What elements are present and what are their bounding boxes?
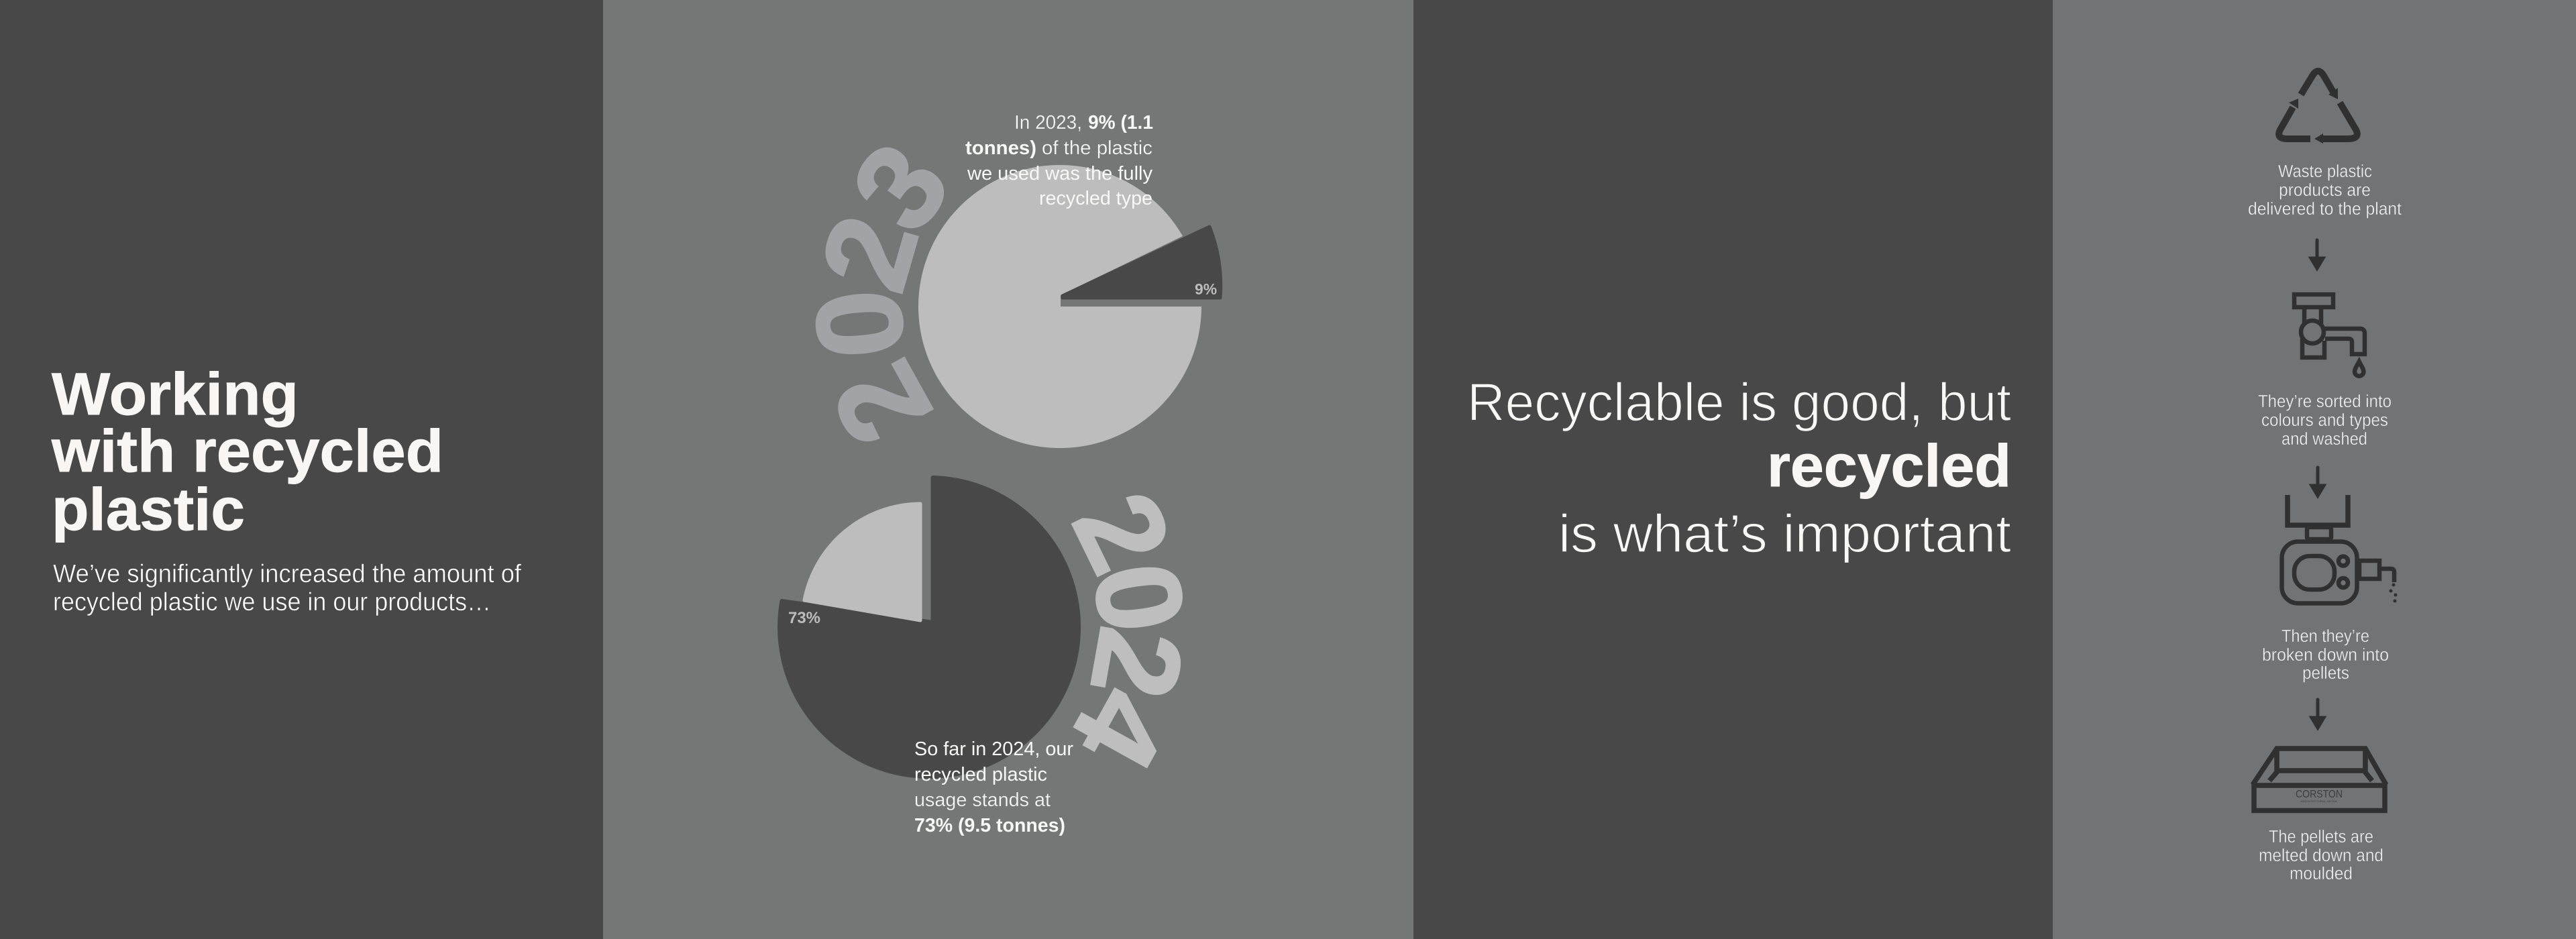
text: step 3: pellets	[2302, 664, 2349, 683]
quote: Recyclable is good, but recycled is what's important	[1467, 372, 2011, 563]
arrow: step 2 to 3	[2312, 467, 2324, 496]
text: step 1: Waste plastic	[2278, 162, 2372, 181]
arrow: step 1 to 2	[2311, 240, 2323, 268]
panel: pie charts	[603, 0, 1413, 939]
text block: 2023 statement: tonnes)	[965, 137, 1036, 159]
arrow: step 3 to 4	[2312, 700, 2324, 728]
text block: 2024 statement: 73% (9.5 tonnes)	[914, 815, 1065, 836]
text block: intro: We’ve significantly increased the amount of	[53, 560, 521, 588]
text: step 4: melted down and	[2259, 846, 2383, 865]
text block: 2023 statement: recycled type	[1039, 188, 1152, 209]
text: step 3	[2262, 627, 2389, 683]
curved year label: 2023	[788, 119, 975, 466]
text: step 2: colours and types	[2261, 411, 2388, 430]
chart: 2023 pie	[918, 165, 1221, 448]
text block: 2023 statement: we used was the fully	[967, 163, 1152, 184]
heading: Working with recycled plastic: plastic	[52, 476, 245, 543]
text: step 1	[2248, 162, 2402, 219]
text block: 2023 statement	[965, 112, 1153, 209]
text block: intro: recycled plastic we use in our products…	[53, 588, 491, 616]
heading: Working with recycled plastic: with recycled	[51, 417, 443, 484]
text block: 2024 statement: usage stands at	[914, 789, 1051, 811]
icon: tap	[2294, 294, 2365, 376]
panel: statement	[1413, 0, 2053, 939]
curved year label: 2024: 2	[1065, 618, 1209, 708]
text: step 1: delivered to the plant	[2248, 200, 2402, 219]
label: 73%: 73%	[788, 609, 820, 627]
heading: Working with recycled plastic	[51, 360, 443, 543]
panel: title	[0, 0, 603, 939]
icon: recycling triangle	[2279, 71, 2357, 144]
text: step 4: moulded	[2290, 865, 2353, 883]
curved year label: 2023: 3	[825, 119, 975, 254]
icon: moulded tray	[2253, 749, 2386, 810]
text: step 2: and washed	[2282, 430, 2367, 449]
text block: intro	[53, 560, 521, 616]
text: step 3: broken down into	[2262, 646, 2389, 665]
text: step 2	[2258, 392, 2392, 449]
text block: 2024 statement: recycled plastic	[914, 764, 1047, 785]
text block: 2024 statement	[914, 738, 1073, 836]
icon: pelletiser machine	[2282, 495, 2398, 604]
text block: 2023 statement: In 2023,	[1014, 112, 1082, 133]
curved year label: 2023: 2	[794, 202, 945, 305]
curved year label: 2024: 2	[1046, 473, 1197, 592]
text: step 1: products are	[2279, 181, 2371, 200]
text block: 2023 statement: 9% (1.1	[1088, 112, 1153, 133]
quote: Recyclable is good, but recycled is what's important: recycled	[1767, 432, 2011, 499]
text: step 4	[2259, 828, 2383, 883]
label: 9%: 9%	[1195, 280, 1217, 298]
curved year label: 2024: 4	[1046, 666, 1196, 790]
text: step 2: They’re sorted into	[2258, 392, 2392, 411]
curved year label: 2023: 0	[788, 284, 930, 364]
text: step 3: Then they’re	[2282, 627, 2369, 646]
logo: Corston: ARCHITECTURAL DETAIL	[2301, 800, 2337, 803]
quote: Recyclable is good, but recycled is what's important: is what’s important	[1558, 504, 2011, 563]
logo: Corston: CORSTON	[2296, 789, 2343, 800]
text block: 2023 statement: of the plastic	[1042, 137, 1152, 159]
text block: 2024 statement: So far in 2024, our	[914, 738, 1073, 760]
text: step 4: The pellets are	[2269, 828, 2373, 846]
panel: recycling process	[2053, 0, 2576, 939]
quote: Recyclable is good, but recycled is what's important: Recyclable is good, but	[1467, 372, 2011, 432]
curved year label: 2024	[1046, 473, 1210, 790]
curved year label: 2023: 2	[805, 341, 958, 466]
heading: Working with recycled plastic: Working	[52, 360, 299, 427]
curved year label: 2024: 0	[1067, 555, 1210, 641]
chart: 2024 pie	[780, 478, 1079, 777]
